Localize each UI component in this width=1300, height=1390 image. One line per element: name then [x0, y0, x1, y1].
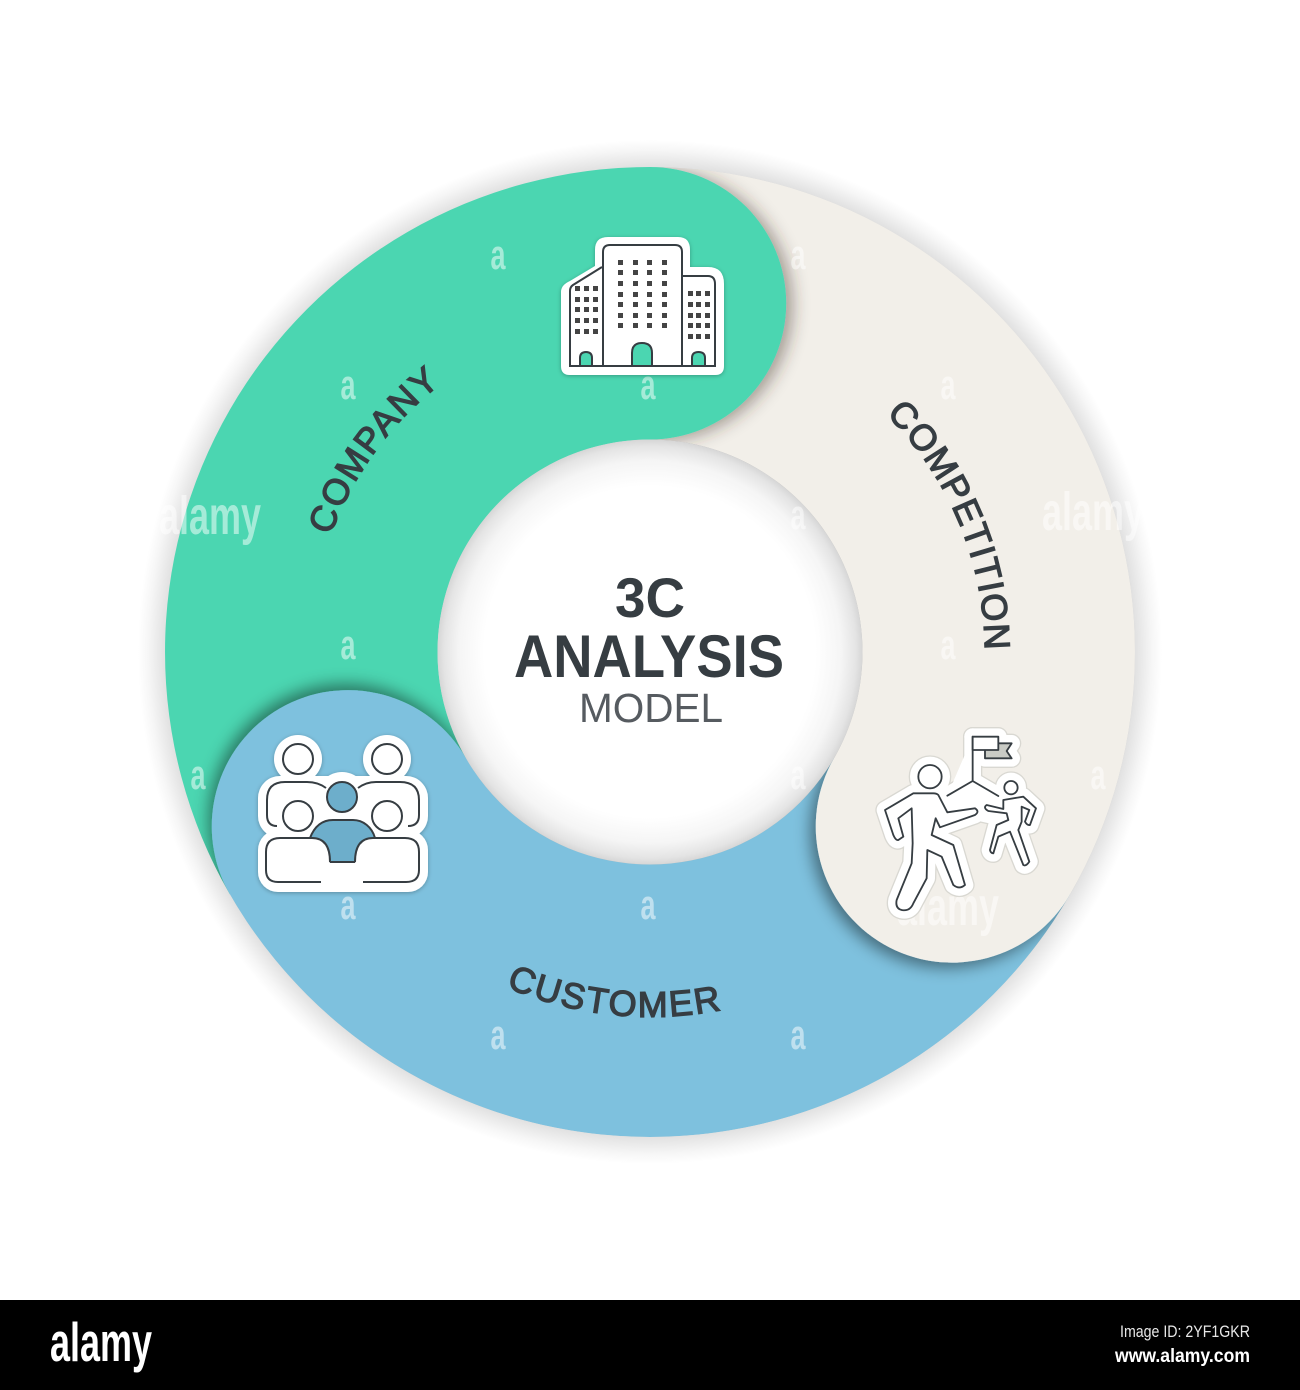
footer bar	[0, 1300, 1300, 1390]
segment: customer (blue)	[212, 690, 1070, 1137]
icon: company buildings	[561, 237, 724, 375]
watermark marks: a	[940, 361, 956, 408]
watermark marks: a	[640, 881, 656, 928]
centre title: 3C	[615, 566, 685, 629]
watermark marks: a	[340, 621, 356, 668]
watermark marks: a	[490, 1011, 506, 1058]
ring outer shadow	[138, 140, 1162, 1164]
watermark marks: a	[490, 231, 506, 278]
label: competition: COMPETITION	[891, 402, 1010, 648]
watermark marks: a	[940, 621, 956, 668]
watermark marks: a	[790, 751, 806, 798]
watermark marks: a	[190, 751, 206, 798]
footer bar: www.alamy.com	[1114, 1346, 1250, 1367]
watermark marks: alamy	[1042, 482, 1144, 542]
watermark marks: alamy	[897, 877, 999, 937]
watermark marks: a	[1090, 751, 1106, 798]
footer bar: Image ID: 2YF1GKR	[1120, 1322, 1250, 1341]
footer bar: alamy	[50, 1311, 152, 1373]
watermark marks: a	[790, 491, 806, 538]
label: customer: CUSTOMER	[510, 967, 722, 1018]
centre title: ANALYSIS	[514, 623, 784, 690]
watermark marks: a	[340, 361, 356, 408]
watermark marks: a	[340, 881, 356, 928]
icon: competition leader and flag	[885, 737, 1036, 910]
segment: company (green)	[165, 167, 786, 894]
centre circle	[438, 440, 862, 864]
icon: customer group	[258, 735, 428, 892]
watermark marks: a	[640, 361, 656, 408]
watermark marks: alamy	[159, 486, 261, 546]
label: company: COMPANY	[310, 364, 434, 532]
watermark marks: a	[790, 231, 806, 278]
watermark marks	[159, 231, 1144, 1058]
company lobe overlapping competition	[640, 167, 786, 440]
centre title: MODEL	[579, 685, 723, 731]
watermark marks: a	[790, 1011, 806, 1058]
centre title	[514, 566, 784, 731]
segment: competition (beige)	[650, 167, 1135, 963]
